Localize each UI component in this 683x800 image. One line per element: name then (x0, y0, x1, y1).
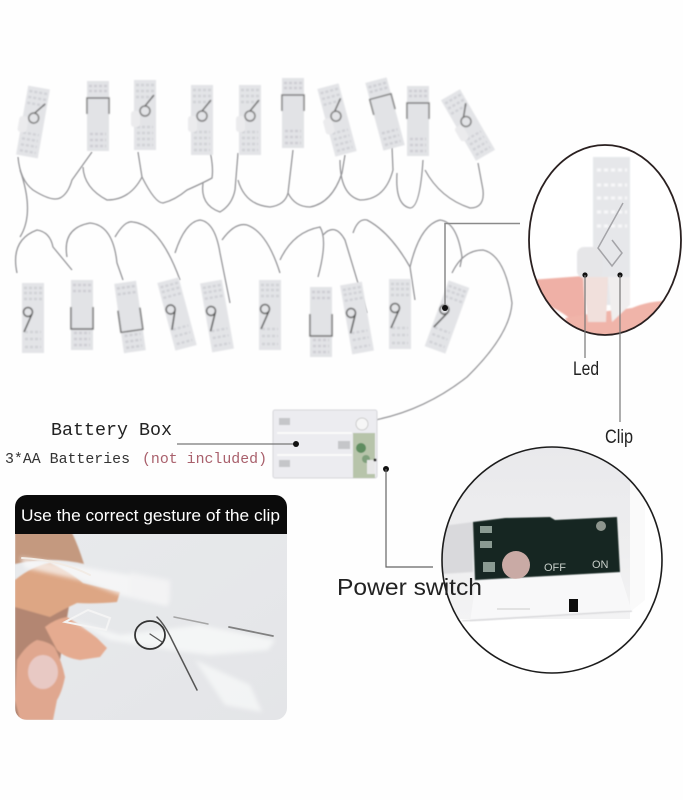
leader: battery box (177, 441, 299, 447)
leader: clip (617, 272, 623, 422)
battery box (273, 410, 377, 478)
clip details (22, 558, 273, 690)
detail circle content: OFF (544, 562, 566, 574)
battery label (5, 421, 299, 468)
detail circle outline (529, 145, 681, 335)
panel heading text: Use the correct gesture of the clip (21, 506, 280, 525)
leader: led (582, 272, 588, 358)
bottom row clips (22, 277, 469, 357)
detail circle outline (442, 447, 662, 673)
wires (16, 143, 512, 420)
panel: correct clip gesture (15, 495, 287, 720)
heading: battery box: Battery Box (51, 421, 172, 441)
detail circle (536, 157, 662, 334)
clip body (20, 557, 275, 712)
detail circle content (442, 448, 632, 622)
top row clips (13, 77, 495, 162)
leader line to clip detail (442, 224, 520, 311)
label: clip: Clip (605, 427, 633, 448)
detail circle content: ON (592, 559, 609, 571)
callout: led and clip detail (442, 145, 683, 448)
panel heading bar (15, 495, 287, 534)
text: not included: (not included) (142, 452, 267, 468)
infographic: photo clip string lights (6, 77, 682, 720)
photo: hand holding clip (15, 533, 287, 720)
leader: power switch (383, 466, 433, 567)
text: battery type: 3*AA Batteries (5, 452, 130, 468)
label: led: Led (573, 359, 599, 380)
label: power switch: Power switch (337, 574, 482, 600)
string of clip lights (13, 77, 512, 420)
callout: power switch detail (337, 447, 665, 682)
